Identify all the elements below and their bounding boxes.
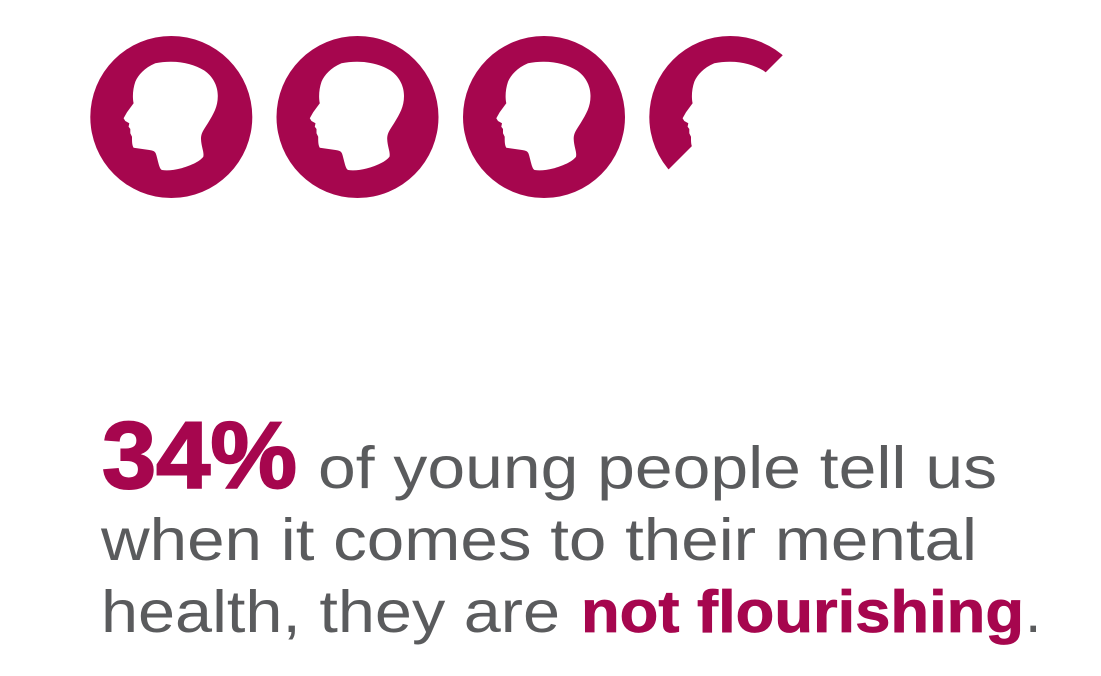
line 3 text: health, they are	[101, 579, 560, 645]
statistic: 34%: 34%	[102, 403, 297, 509]
icon: head in circle 1	[90, 36, 252, 198]
full stop: .	[1025, 579, 1041, 645]
icon: head in circle 3	[463, 36, 625, 198]
line 1 text: of young people tell us	[318, 435, 997, 501]
line 2 text: when it comes to their mental	[100, 507, 977, 573]
icon: partial head circle 4	[649, 36, 783, 170]
icon: head in circle 2	[276, 36, 438, 198]
icon row: four head icons, 3.4 of 4 filled	[90, 36, 811, 198]
emphasis: not flourishing: not flourishing	[581, 579, 1024, 645]
statement text	[100, 403, 1041, 645]
